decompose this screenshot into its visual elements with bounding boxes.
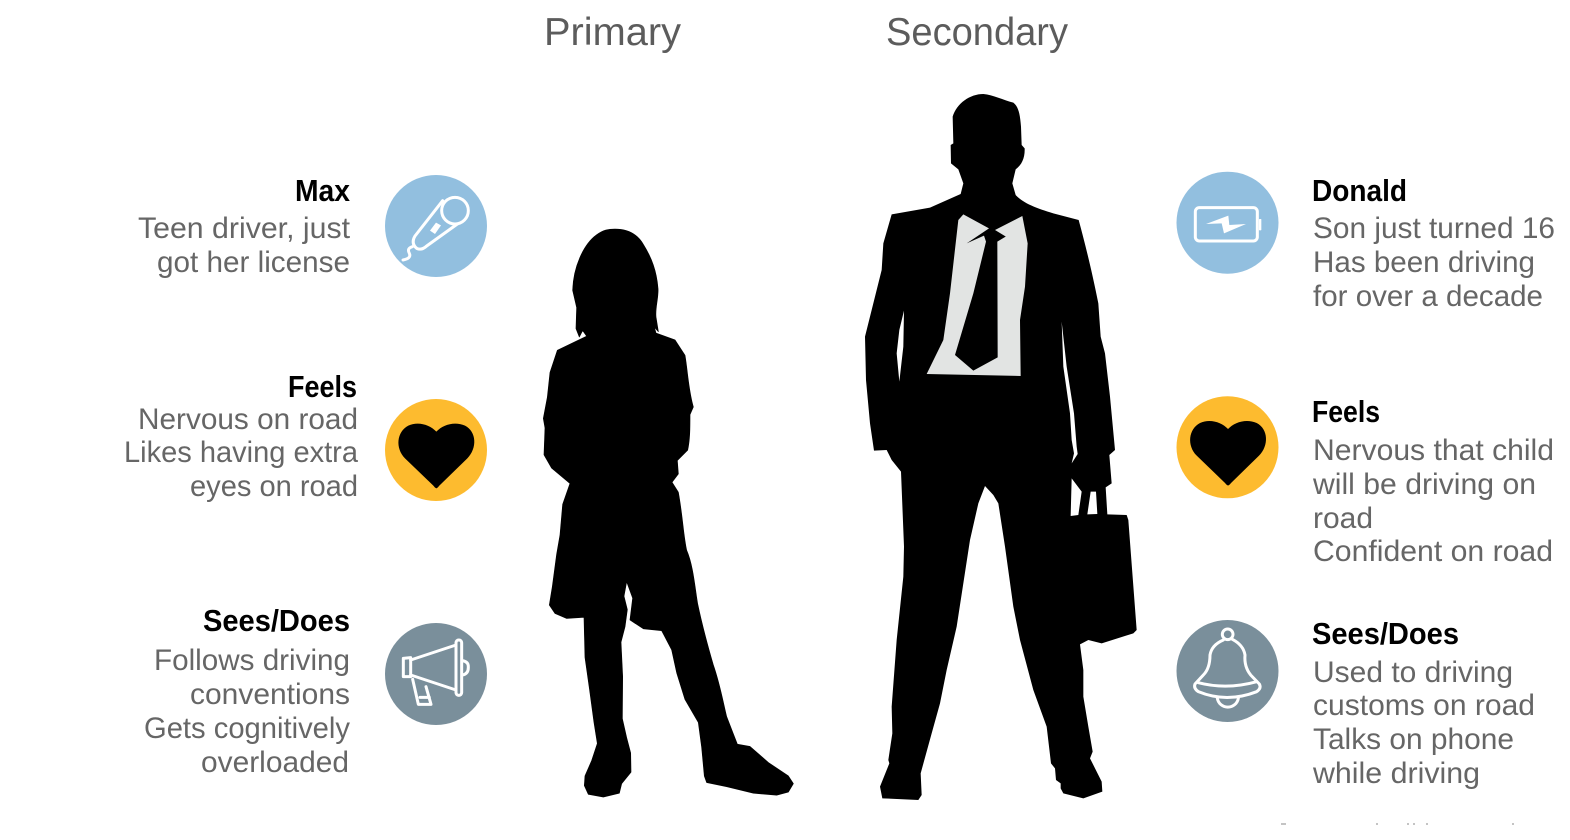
icon: microphone — [385, 175, 487, 277]
text: Max feelings: eyes on road — [190, 470, 358, 503]
text: Donald feelings: Confident on road — [1313, 535, 1553, 568]
heading: Sees/Does: Sees/Does — [203, 603, 350, 638]
panel: Donald feels — [1176, 394, 1554, 568]
heading: Feels: Feels — [1312, 394, 1380, 429]
text: Max behaviours: overloaded — [201, 746, 349, 779]
text: Max description: Teen driver, just — [138, 212, 351, 245]
heading: Primary: Primary — [544, 11, 681, 54]
text: Donald description — [1313, 212, 1555, 313]
text: Max behaviours: Follows driving — [154, 644, 350, 677]
text: Donald behaviours: while driving — [1312, 757, 1480, 790]
text: Max feelings: Nervous on road — [138, 403, 358, 436]
icon: heart — [385, 399, 487, 501]
shirt and tie — [927, 214, 1028, 376]
icon: battery — [1176, 172, 1278, 274]
heading: Feels: Feels — [288, 369, 357, 404]
icon: bell — [1176, 620, 1278, 722]
text: Max behaviours: conventions — [190, 678, 350, 711]
panel: Max feels — [124, 369, 487, 503]
heading: Donald: Donald — [1312, 173, 1407, 208]
text: Donald behaviours: Used to driving — [1313, 656, 1513, 689]
silhouette: child (primary persona) — [543, 229, 793, 797]
icon: heart — [1176, 396, 1278, 498]
text: Donald behaviours: Talks on phone — [1313, 723, 1514, 756]
text: Donald feelings — [1312, 434, 1554, 568]
text: Donald feelings: Nervous that child — [1313, 434, 1554, 467]
text: Donald behaviours: customs on road — [1313, 689, 1535, 722]
heading: Secondary: Secondary — [886, 11, 1068, 54]
text: Max description — [138, 212, 351, 279]
text: Donald behaviours — [1312, 656, 1535, 790]
text: Donald description: for over a decade — [1313, 280, 1543, 313]
panel: Donald sees and does — [1176, 616, 1535, 790]
text: Max feelings — [124, 403, 358, 503]
text: Donald description: Has been driving — [1313, 246, 1535, 279]
text: Max description: got her license — [157, 246, 350, 279]
text: Max behaviours: Gets cognitively — [144, 712, 350, 745]
text: Max behaviours — [144, 644, 350, 779]
text: Donald feelings: road — [1313, 502, 1373, 535]
panel: Max sees and does — [144, 603, 487, 779]
silhouette: adult man with bag (secondary persona) — [865, 94, 1137, 800]
heading: Sees/Does: Sees/Does — [1312, 616, 1459, 651]
panel: Max — [138, 173, 487, 279]
panel: Donald — [1176, 172, 1555, 313]
icon: megaphone — [385, 623, 487, 725]
text: Max feelings: Likes having extra — [124, 436, 358, 469]
heading: Max: Max — [295, 173, 351, 208]
text: Donald feelings: will be driving on — [1312, 468, 1536, 501]
text: Donald description: Son just turned 16 — [1313, 212, 1555, 245]
